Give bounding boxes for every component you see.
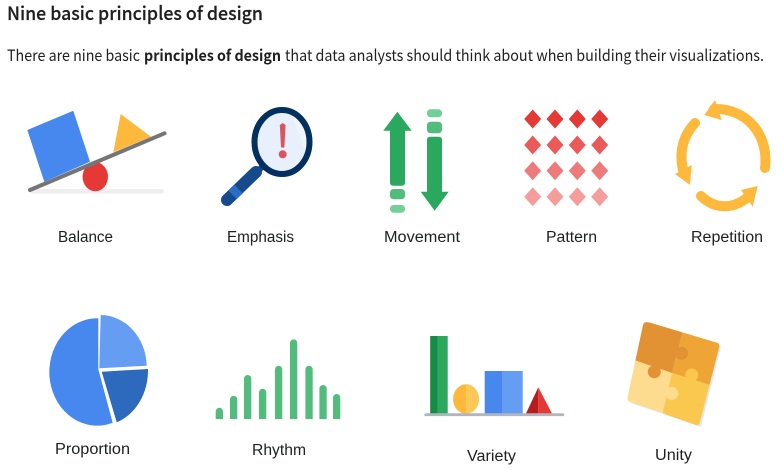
label: Emphasis: Emphasis [227,229,294,246]
label: Unity: Unity [655,447,692,464]
label: Movement: Movement [384,229,461,246]
intro text: principles of design [144,44,281,66]
icon: balance [27,111,164,194]
icon: repetition cycle arrows [675,100,765,207]
title: Nine basic principles of design [7,0,263,26]
icon: movement arrows [383,109,449,213]
label: Balance: Balance [58,229,113,246]
icon: pattern diamonds [524,110,608,206]
label: Repetition: Repetition [691,229,763,246]
label: Variety: Variety [467,448,516,465]
icon: emphasis magnifier [227,110,310,200]
label: Proportion: Proportion [55,441,130,458]
icon: proportion pie chart [49,315,148,426]
intro text: There are nine basic [7,44,140,66]
label: Rhythm: Rhythm [252,442,306,459]
intro text [7,44,764,66]
icon: variety shapes [424,336,564,416]
icon: rhythm bars [216,339,340,419]
label: Pattern: Pattern [546,229,597,246]
icon: unity puzzle [627,322,721,427]
